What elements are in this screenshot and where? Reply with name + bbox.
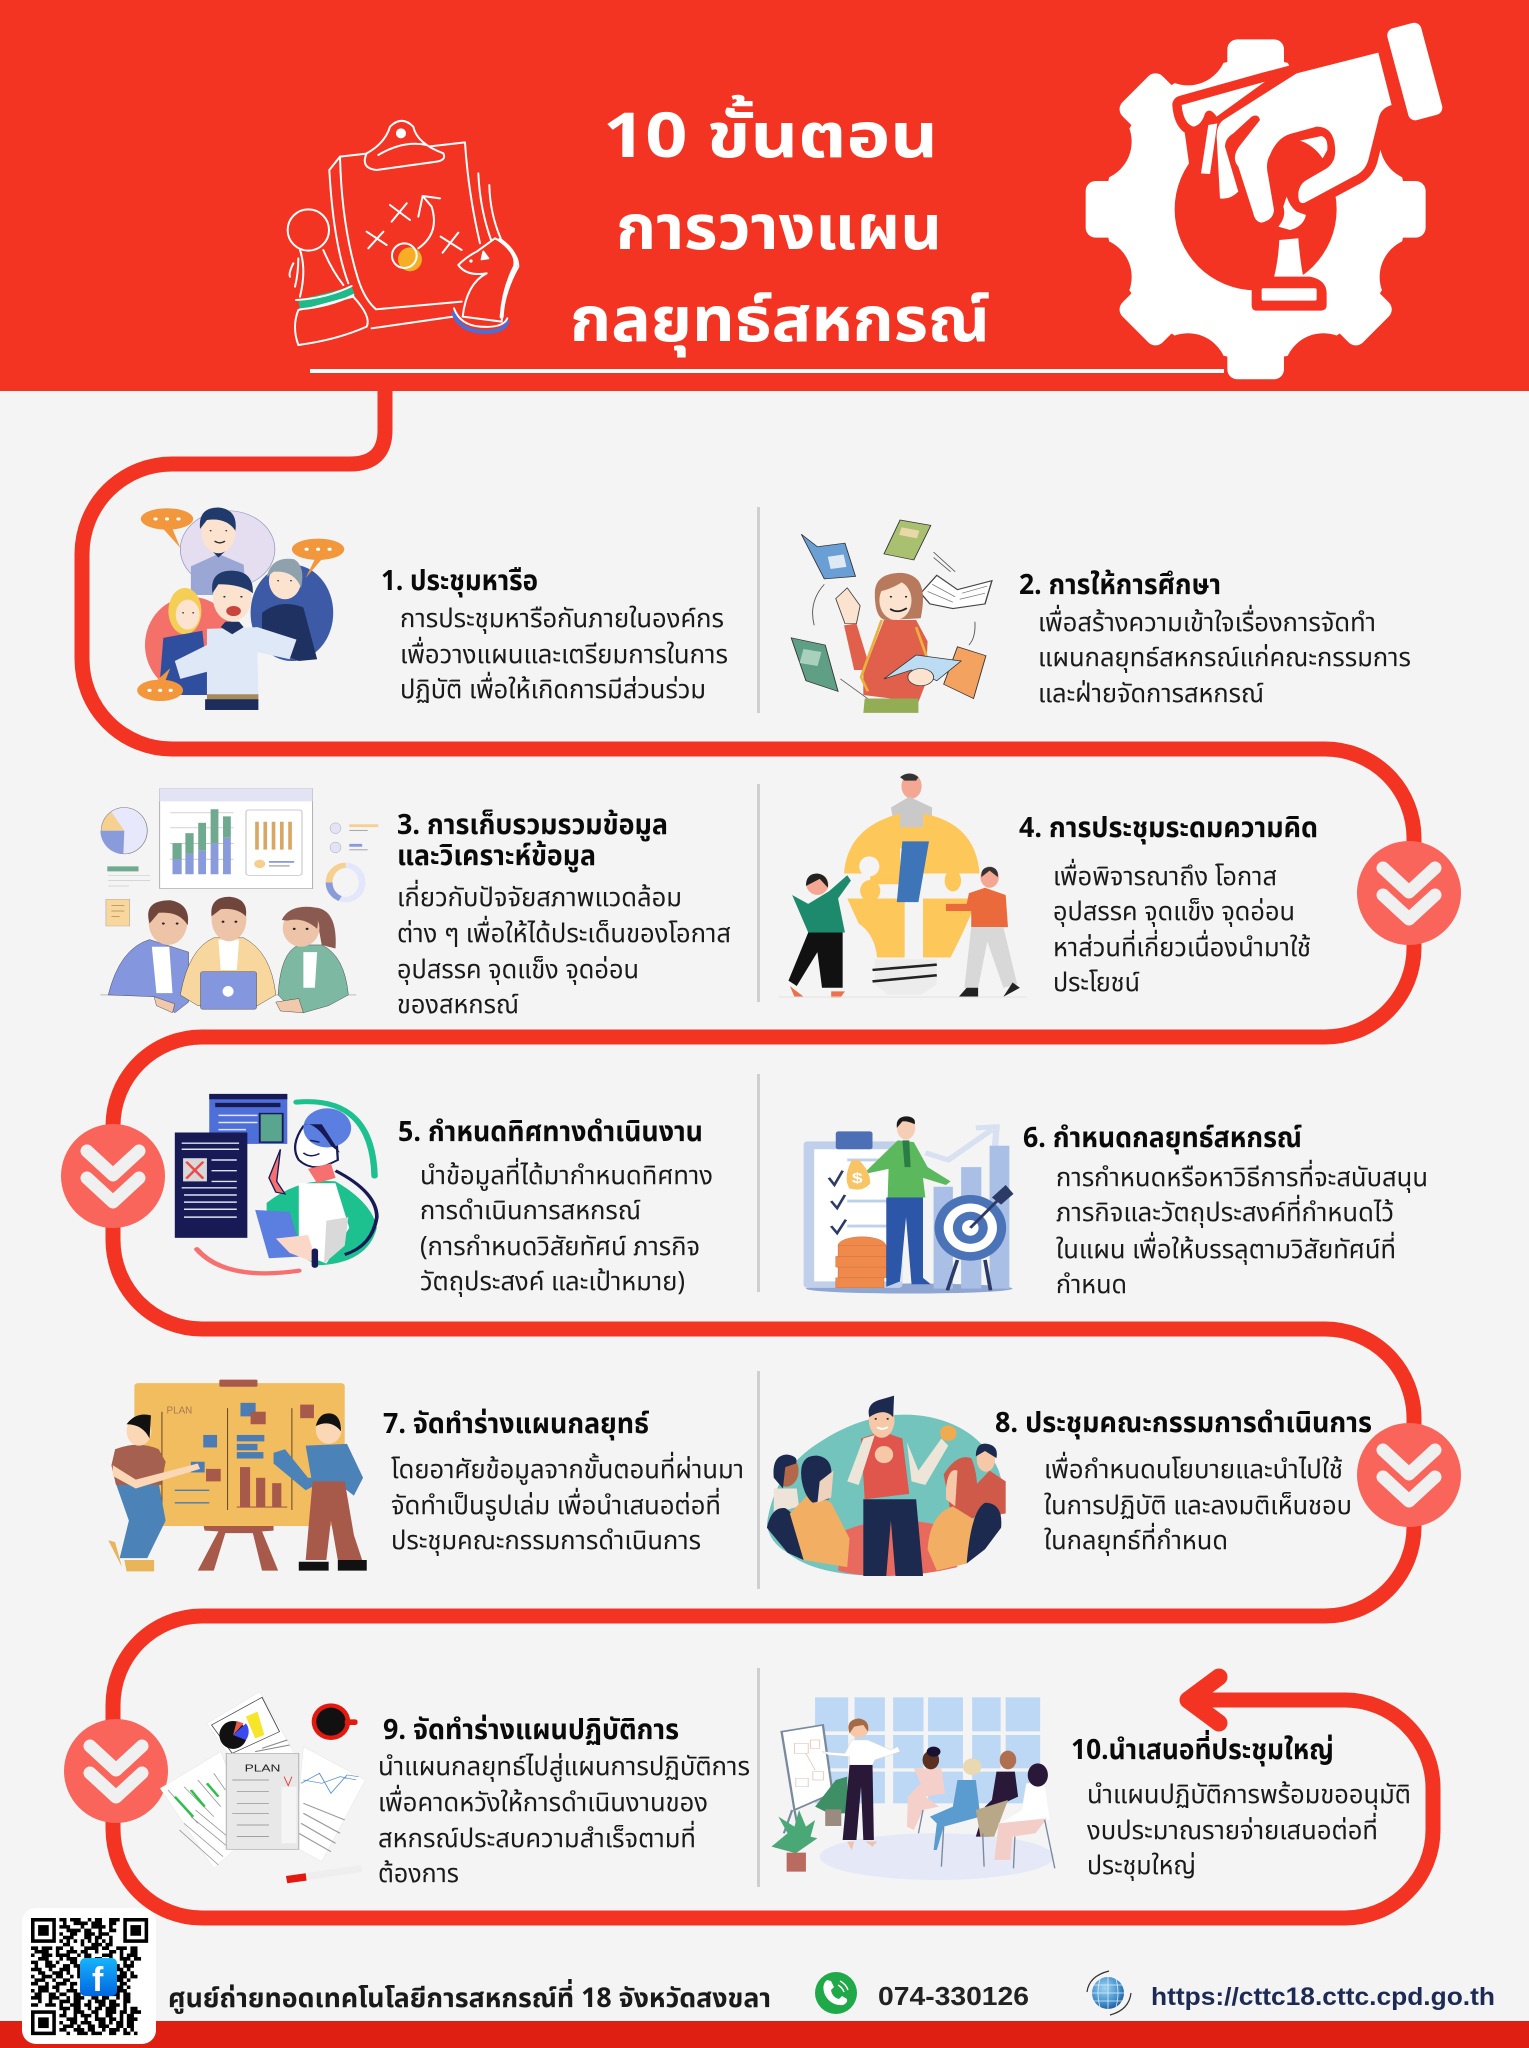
header panel [0, 0, 1529, 412]
step 2 description [1038, 603, 1411, 714]
step 8 heading: 8. ประชุมคณะกรรมการดำเนินการ [995, 1402, 1372, 1445]
step 6 description: การกำหนดหรือหาวิธีการที่จะสนับสนุน [1056, 1158, 1428, 1198]
step 3 description: ของสหกรณ์ [397, 985, 519, 1025]
illustration: team assembling puzzle light bulb [778, 774, 1026, 998]
phone number: 074-330126 [878, 1981, 1029, 2011]
step 3 description: เกี่ยวกับปัจจัยสภาพแวดล้อม [397, 878, 682, 918]
step 5 description: การดำเนินการสหกรณ์ [420, 1191, 641, 1231]
title: การวางแผน [616, 183, 942, 277]
step 8 panel [767, 1396, 1372, 1576]
step 2 description: และฝ่ายจัดการสหกรณ์ [1038, 674, 1264, 714]
illustration: data analysis team [100, 789, 378, 1013]
chevron badge: left row 3 [61, 1124, 165, 1228]
step 1 heading: 1. ประชุมหารือ [381, 560, 538, 603]
illustration: strategy target and businessman [804, 1116, 1013, 1294]
step 9 description: สหกรณ์ประสบความสำเร็จตามที่ [378, 1819, 696, 1859]
step 6 description [1056, 1158, 1428, 1305]
step 7 description: โดยอาศัยข้อมูลจากขั้นตอนที่ผ่านมา [391, 1450, 744, 1490]
step 3 description: อุปสรรค จุดแข็ง จุดอ่อน [397, 950, 639, 990]
step 5 description: นำข้อมูลที่ได้มากำหนดทิศทาง [420, 1156, 713, 1196]
step 8 description: เพื่อกำหนดนโยบายและนำไปใช้ [1044, 1450, 1343, 1490]
icon: globe [1087, 1971, 1131, 2015]
step 7 heading: 7. จัดทำร่างแผนกลยุทธ์ [383, 1403, 649, 1446]
illustration: two people at planning board: PLAN [167, 1406, 192, 1416]
step 4 heading: 4. การประชุมระดมความคิด [1019, 807, 1318, 850]
step 8 description [1044, 1450, 1352, 1561]
title [570, 91, 990, 369]
step 7 description [391, 1450, 744, 1561]
illustration: strategy target and businessman: $ [852, 1169, 863, 1187]
illustration: two people at planning board [108, 1380, 367, 1571]
step 6 panel [804, 1116, 1428, 1305]
step 1 description: การประชุมหารือกันภายในองค์กร [400, 599, 724, 639]
step 10 description [1087, 1775, 1411, 1886]
step 5 description: วัตถุประสงค์ และเป้าหมาย) [420, 1262, 685, 1302]
chevron badge: left row 5 [64, 1719, 168, 1823]
step 4 description: เพื่อพิจารณาถึง โอกาส [1053, 857, 1277, 897]
step 5 panel [175, 1094, 713, 1302]
step 9 heading: 9. จัดทำร่างแผนปฏิบัติการ [383, 1709, 679, 1752]
step 7 description: ประชุมคณะกรรมการดำเนินการ [391, 1521, 701, 1561]
icon: gear with hand moving chess piece [1086, 22, 1442, 380]
illustration: woman with documents [175, 1094, 377, 1273]
step 4 description: หาส่วนที่เกี่ยวเนื่องนำมาใช้ [1053, 928, 1311, 968]
chevron badge: right row 4 [1357, 1423, 1461, 1527]
step 3 heading: และวิเคราะห์ข้อมูล [397, 835, 596, 878]
step 10 description: ประชุมใหญ่ [1087, 1846, 1196, 1886]
title underline [310, 369, 1224, 373]
step 5 heading: 5. กำหนดทิศทางดำเนินงาน [398, 1111, 703, 1154]
serpentine path with arrow [82, 391, 1433, 1918]
chevron badge: right row 2 [1357, 841, 1461, 945]
step 1 panel [137, 507, 728, 710]
step 9 description: นำแผนกลยุทธ์ไปสู่แผนการปฏิบัติการ [378, 1747, 750, 1787]
step 9 description [378, 1747, 750, 1894]
step 2 heading: 2. การให้การศึกษา [1019, 564, 1221, 607]
website url: https://cttc18.cttc.cpd.go.th [1151, 1983, 1495, 2011]
step 4 panel [778, 774, 1318, 1003]
step 1 description: เพื่อวางแผนและเตรียมการในการ [400, 635, 728, 675]
step 6 heading: 6. กำหนดกลยุทธ์สหกรณ์ [1023, 1117, 1302, 1160]
illustration: woman juggling books [791, 520, 992, 713]
footer band [0, 2021, 1529, 2048]
step 3 description [397, 878, 731, 1025]
step 10 heading: 10.นำเสนอที่ประชุมใหญ่ [1071, 1729, 1334, 1772]
step 6 description: ภารกิจและวัตถุประสงค์ที่กำหนดไว้ [1056, 1193, 1394, 1233]
illustration: people meeting [137, 507, 344, 710]
step 10 description: นำแผนปฏิบัติการพร้อมขออนุมัติ [1087, 1775, 1411, 1815]
step 10 panel [771, 1697, 1411, 1886]
step 4 description [1053, 857, 1311, 1003]
QR code with facebook badge [22, 1908, 156, 2044]
icon: clipboard with chess pieces [288, 121, 518, 345]
step 8 description: ในการปฏิบัติ และลงมติเห็นชอบ [1044, 1486, 1352, 1526]
step 2 panel [791, 520, 1411, 714]
step 10 description: งบประมาณรายจ่ายเสนอต่อที่ [1087, 1811, 1378, 1851]
step 3 heading: 3. การเก็บรวมรวมข้อมูล [397, 804, 668, 847]
step 9 description: เพื่อคาดหวังให้การดำเนินงานของ [378, 1783, 708, 1823]
step 6 description: กำหนด [1056, 1265, 1127, 1305]
step 3 description: ต่าง ๆ เพื่อให้ได้ประเด็นของโอกาส [397, 914, 731, 954]
illustration: plan documents and coffee [160, 1692, 365, 1883]
step 5 description [420, 1156, 713, 1302]
step 4 description: อุปสรรค จุดแข็ง จุดอ่อน [1053, 892, 1295, 932]
step 6 description: ในแผน เพื่อให้บรรลุตามวิสัยทัศน์ที่ [1056, 1230, 1396, 1270]
step 5 description: (การกำหนดวิสัยทัศน์ ภารกิจ [420, 1227, 700, 1267]
step 7 panel [108, 1380, 744, 1571]
step 1 description: ปฏิบัติ เพื่อให้เกิดการมีส่วนร่วม [400, 670, 706, 710]
step 3 heading [397, 804, 668, 878]
step 7 description: จัดทำเป็นรูปเล่ม เพื่อนำเสนอต่อที่ [391, 1486, 721, 1526]
step 8 description: ในกลยุทธ์ที่กำหนด [1044, 1521, 1228, 1561]
step 3 panel [100, 789, 731, 1025]
illustration: plan documents and coffee: PLAN [245, 1763, 280, 1774]
illustration: committee meeting group [767, 1396, 1006, 1576]
icon: phone [815, 1972, 857, 2014]
step 9 description: ต้องการ [378, 1854, 459, 1894]
organisation name: ศูนย์ถ่ายทอดเทคโนโลยีการสหกรณ์ที่ 18 จังหวัดสงขลา [168, 1979, 771, 2020]
step 2 description: เพื่อสร้างความเข้าใจเรื่องการจัดทำ [1038, 603, 1376, 643]
step 9 panel [160, 1692, 750, 1894]
step 1 description [400, 599, 728, 710]
title: กลยุทธ์สหกรณ์ [570, 275, 990, 369]
QR code with facebook badge: f [92, 1961, 104, 1999]
title: 10 ขั้นตอน [603, 91, 938, 185]
step 2 description: แผนกลยุทธ์สหกรณ์แก่คณะกรรมการ [1038, 638, 1411, 678]
step 4 description: ประโยชน์ [1053, 963, 1140, 1003]
illustration: presenter and seated audience [771, 1697, 1055, 1880]
